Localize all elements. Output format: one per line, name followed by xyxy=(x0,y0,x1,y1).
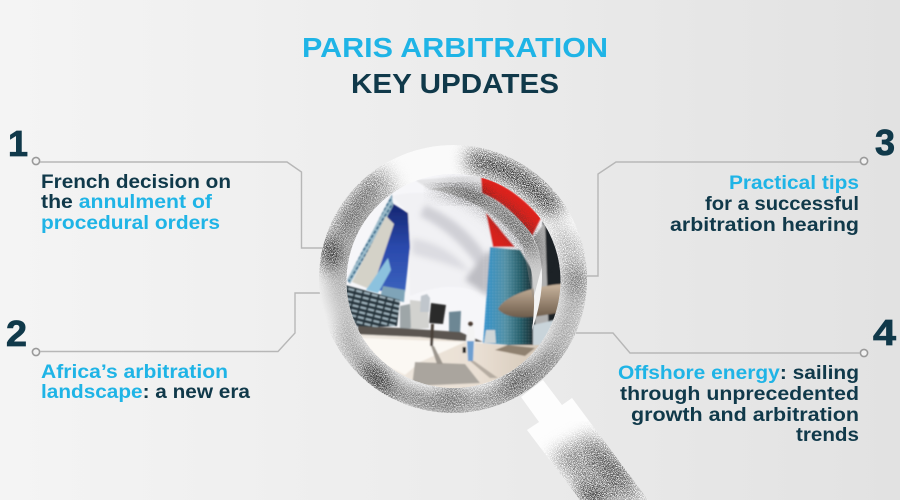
left dark building xyxy=(345,285,400,328)
walking figure xyxy=(466,326,475,361)
lens crescent xyxy=(430,185,543,330)
item 3 xyxy=(670,122,895,236)
item 4 xyxy=(618,312,896,446)
plaza shadow xyxy=(412,362,480,386)
title xyxy=(302,32,608,99)
flag blue field xyxy=(377,203,411,292)
item 4 text: through unprecedented xyxy=(620,383,859,405)
item 4 text: trends xyxy=(796,424,859,446)
item 1 text: procedural orders xyxy=(41,212,220,234)
connector line 2 xyxy=(32,293,320,356)
far right building xyxy=(532,220,562,347)
title: KEY UPDATES xyxy=(351,68,559,99)
item 2 text: Africa’s arbitration xyxy=(41,361,228,383)
base line of buildings xyxy=(358,326,483,342)
item 3 text xyxy=(670,172,859,236)
magnifying glass xyxy=(319,145,655,500)
item 1 text: French decision on xyxy=(41,171,231,193)
item 2 text: landscape : a new era xyxy=(41,381,250,403)
connector line 4 xyxy=(576,333,868,357)
sign post xyxy=(429,303,446,324)
number 2: 2 xyxy=(6,313,27,354)
flag folds xyxy=(412,205,500,296)
item 4 text: growth and arbitration xyxy=(631,404,859,426)
number 3: 3 xyxy=(875,122,895,163)
flag white field xyxy=(392,193,515,298)
right blue tower xyxy=(483,247,533,347)
saucer structure xyxy=(498,284,562,317)
magnifier handle xyxy=(521,380,648,500)
item 4 text: Offshore energy : sailing xyxy=(618,362,859,384)
item 2 text xyxy=(41,361,250,403)
item 3 text: for a successful xyxy=(705,193,859,215)
item 1 xyxy=(8,123,231,234)
item 4 text xyxy=(618,362,859,446)
connector line 1 xyxy=(32,157,324,248)
distant buildings xyxy=(400,304,412,330)
connector line 3 xyxy=(584,157,868,276)
item 3 text: arbitration hearing xyxy=(670,214,859,236)
left towers xyxy=(347,194,393,284)
city photo with French flag xyxy=(346,174,560,388)
item 1 text: the annulment of xyxy=(41,191,213,213)
item 2 xyxy=(6,313,250,403)
item 3 text: Practical tips xyxy=(729,172,859,194)
flag red field xyxy=(481,177,541,236)
ground plaza xyxy=(360,333,540,388)
number 4: 4 xyxy=(873,312,896,353)
number 1: 1 xyxy=(8,123,28,164)
magnifier ring xyxy=(319,145,590,425)
item 1 text xyxy=(41,171,231,234)
title: PARIS ARBITRATION xyxy=(302,32,608,63)
